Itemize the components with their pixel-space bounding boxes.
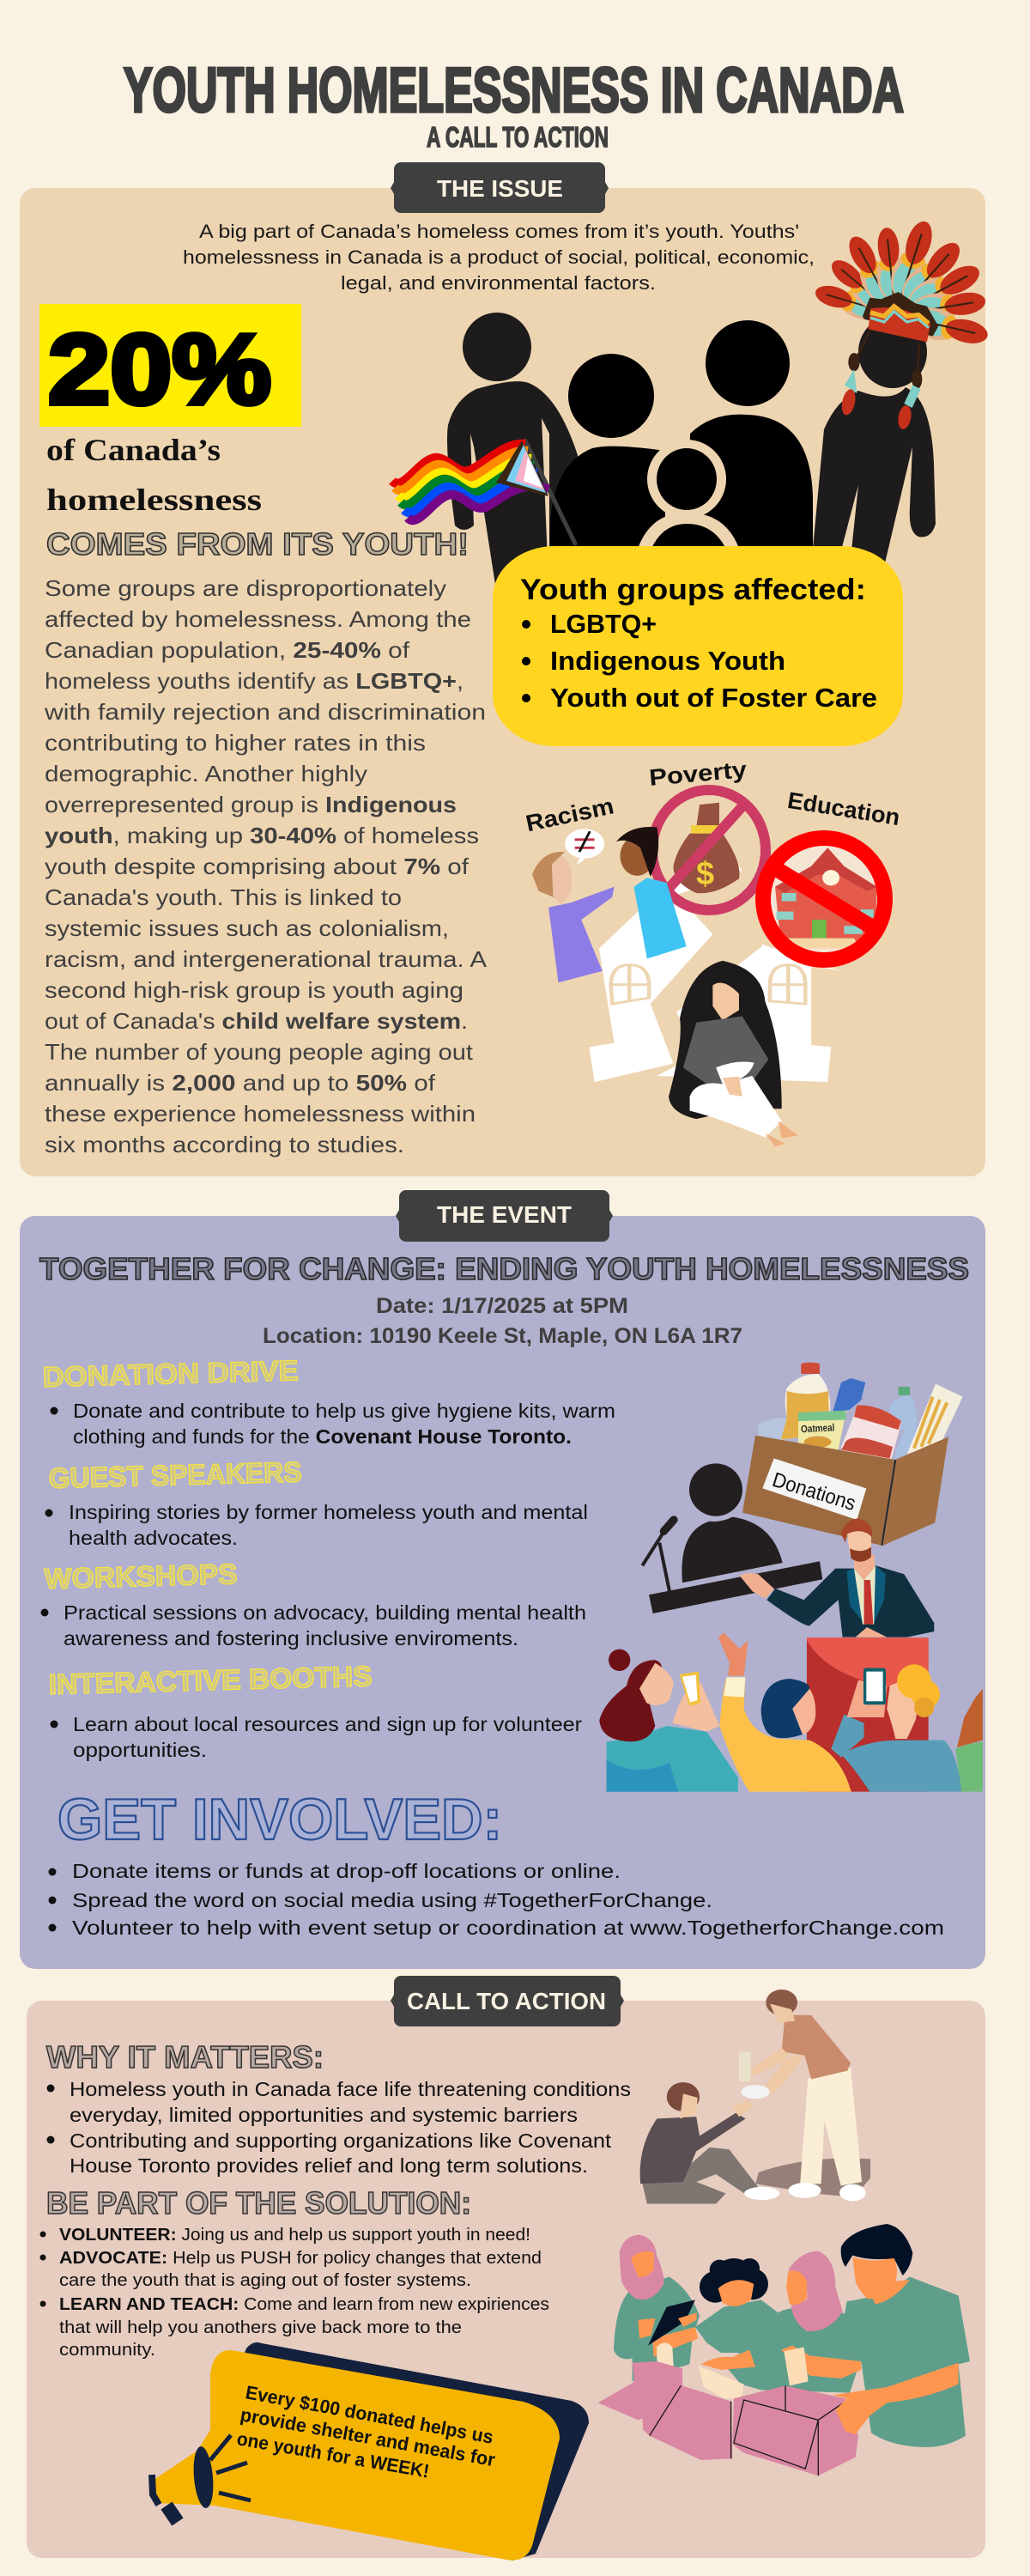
section tag: the issue	[391, 162, 609, 213]
label: education: Education	[785, 787, 902, 830]
icon: poverty money bag no-sign: $	[696, 856, 714, 892]
illustration: megaphone callout: Every $100 donated helps us	[244, 2381, 495, 2448]
icon: pride flag	[392, 440, 575, 544]
body paragraph: second high-risk group is youth aging	[45, 977, 464, 1003]
text: guest speakers: health advocates.	[69, 1527, 238, 1549]
illustration: family silhouettes	[447, 313, 936, 601]
list: why it matters: everyday, limited opportunities and systemic barriers	[70, 2104, 578, 2126]
subtitle: A CALL TO ACTION	[427, 121, 609, 153]
text: interactive booths	[50, 1713, 582, 1761]
text: donation drive: Donate and contribute to help us give hygiene kits, warm	[73, 1400, 615, 1422]
illustration: megaphone callout: provide shelter and meals for	[239, 2403, 497, 2470]
body paragraph: Canada's youth. This is linked to	[45, 884, 402, 910]
text: interactive booths: opportunities.	[73, 1739, 207, 1761]
intro text: A big part of Canada’s homeless comes from it’s youth. Youths'	[199, 221, 799, 242]
list: get involved: Volunteer to help with event setup or coordination at www.TogetherforChange.com	[72, 1917, 944, 1939]
list: be part of the solution	[39, 2226, 549, 2360]
section tag: the issue: THE ISSUE	[437, 175, 563, 202]
list: be part of the solution: VOLUNTEER: Joing us and help us support youth in need!	[59, 2226, 530, 2245]
list: be part of the solution: that will help you anothers give back more to the	[59, 2318, 462, 2337]
panel: call to action	[27, 1976, 985, 2561]
list: why it matters: Contributing and supporting organizations like Covenant	[70, 2129, 612, 2152]
panel: the issue	[20, 162, 991, 1176]
list: why it matters	[46, 2078, 631, 2177]
list: why it matters: House Toronto provides relief and long term solutions.	[70, 2154, 588, 2177]
stat: 20 percent: 20%	[48, 313, 271, 425]
list: get involved: Donate items or funds at drop-off locations or online.	[72, 1860, 621, 1882]
stat: 20 percent	[39, 304, 301, 427]
text: workshops: Practical sessions on advocacy, building mental health	[64, 1601, 586, 1624]
body paragraph: overrepresented group is Indigenous	[45, 792, 457, 817]
stat caption	[46, 433, 262, 517]
body paragraph: annually is 2,000 and up to 50% of	[45, 1070, 436, 1096]
text: donation drive	[50, 1400, 615, 1448]
stat caption: of Canada’s	[46, 433, 221, 467]
list: get involved	[48, 1860, 944, 1939]
list: get involved: Spread the word on social media using #TogetherForChange.	[72, 1889, 712, 1911]
illustration: giving food	[640, 1990, 870, 2204]
callout: youth groups affected: Youth groups affected:	[520, 574, 866, 606]
body paragraph: Canadian population, 25-40% of	[45, 637, 410, 663]
date and location	[263, 1294, 742, 1348]
callout: youth groups affected: Youth out of Foster Care	[550, 683, 877, 713]
body paragraph: contributing to higher rates in this	[45, 730, 426, 756]
icon: school no-sign	[763, 837, 885, 961]
body paragraph: affected by homelessness. Among the	[45, 606, 471, 632]
illustration: speaker at lectern	[642, 1463, 822, 1613]
illustration: racism argument	[532, 827, 687, 982]
text: workshops	[41, 1601, 586, 1649]
body paragraph	[44, 575, 488, 1157]
callout: youth groups affected	[493, 546, 903, 746]
body paragraph: out of Canada's child welfare system .	[45, 1008, 468, 1034]
text: donation drive: clothing and funds for the Covenant House Toronto.	[73, 1425, 572, 1448]
illustration: crowd with phones	[599, 1633, 983, 1792]
panel background	[27, 2001, 985, 2558]
panel background	[20, 1216, 985, 1969]
heading: be part of the solution: BE PART OF THE SOLUTION:	[46, 2185, 471, 2221]
panel: the event	[20, 1190, 985, 1969]
intro text: legal, and environmental factors.	[341, 272, 656, 294]
illustration: donation box: Donations	[770, 1468, 858, 1516]
icon: feather headdress	[812, 216, 991, 430]
illustration: houses	[589, 837, 841, 1082]
list: why it matters: Homeless youth in Canada face life threatening conditions	[70, 2078, 631, 2100]
body paragraph: The number of young people aging out	[45, 1039, 474, 1065]
heading: why it matters: WHY IT MATTERS:	[46, 2039, 324, 2075]
body paragraph: racism, and intergenerational trauma. A	[45, 946, 488, 972]
text: workshops: awareness and fostering inclusive enviroments.	[64, 1627, 518, 1649]
label: racism: Racism	[524, 793, 616, 836]
section tag: the event	[396, 1190, 613, 1242]
list: be part of the solution: LEARN AND TEACH: Come and learn from new expiriences	[59, 2295, 549, 2314]
section tag: call to action: CALL TO ACTION	[407, 1988, 606, 2014]
text: guest speakers: Inspiring stories by former homeless youth and mental	[69, 1501, 588, 1523]
illustration: donation box: Oatmeal	[801, 1421, 835, 1435]
body paragraph: systemic issues such as colonialism,	[45, 915, 449, 941]
body paragraph: youth , making up 30-40% of homeless	[45, 823, 479, 848]
heading: comes from its youth: COMES FROM ITS YOUTH!	[46, 526, 469, 562]
illustration: megaphone callout	[151, 2342, 589, 2561]
heading: workshops: WORKSHOPS	[44, 1558, 238, 1595]
label: poverty: Poverty	[648, 756, 748, 791]
body paragraph: Some groups are disproportionately	[45, 575, 446, 601]
body paragraph: these experience homelessness within	[45, 1101, 476, 1127]
heading: guest speakers: GUEST SPEAKERS	[48, 1455, 302, 1494]
intro text	[183, 221, 815, 294]
body paragraph: homeless youths identify as LGBTQ+ ,	[45, 668, 464, 694]
body paragraph: six months according to studies.	[45, 1132, 404, 1157]
list: be part of the solution: ADVOCATE: Help us PUSH for policy changes that extend	[59, 2249, 542, 2268]
illustration: donation box	[742, 1363, 963, 1546]
heading: donation drive: DONATION DRIVE	[42, 1354, 299, 1393]
heading: interactive booths: INTERACTIVE BOOTHS	[48, 1660, 373, 1700]
illustration: presenter in suit	[740, 1518, 934, 1637]
date and location: Location: 10190 Keele St, Maple, ON L6A 1R7	[263, 1324, 742, 1348]
event heading: TOGETHER FOR CHANGE: ENDING YOUTH HOMELESSNESS	[39, 1251, 969, 1286]
body paragraph: demographic. Another highly	[45, 761, 367, 787]
callout: youth groups affected: LGBTQ+	[550, 609, 657, 639]
body paragraph: with family rejection and discrimination	[44, 699, 486, 725]
body paragraph: youth despite comprising about 7% of	[45, 854, 470, 879]
text: guest speakers	[45, 1501, 588, 1549]
section tag: the event: THE EVENT	[437, 1201, 572, 1228]
heading: get involved: GET INVOLVED:	[58, 1787, 502, 1852]
date and location: Date: 1/17/2025 at 5PM	[376, 1294, 628, 1318]
list: be part of the solution: care the youth that is aging out of foster systems.	[59, 2271, 471, 2290]
stat caption: homelessness	[46, 483, 262, 517]
callout: youth groups affected: Indigenous Youth	[550, 646, 785, 676]
intro text: homelessness in Canada is a product of social, political, economic,	[183, 246, 815, 268]
illustration: volunteers packing boxes	[598, 2224, 970, 2476]
text: interactive booths: Learn about local resources and sign up for volunteer	[73, 1713, 582, 1735]
illustration: megaphone callout: one youth for a WEEK!	[235, 2427, 431, 2482]
section tag: call to action	[391, 1976, 624, 2026]
panel background	[20, 188, 985, 1176]
illustration: sad girl	[669, 961, 798, 1146]
icon: poverty money bag no-sign	[652, 790, 766, 910]
list: be part of the solution: community.	[59, 2341, 155, 2360]
